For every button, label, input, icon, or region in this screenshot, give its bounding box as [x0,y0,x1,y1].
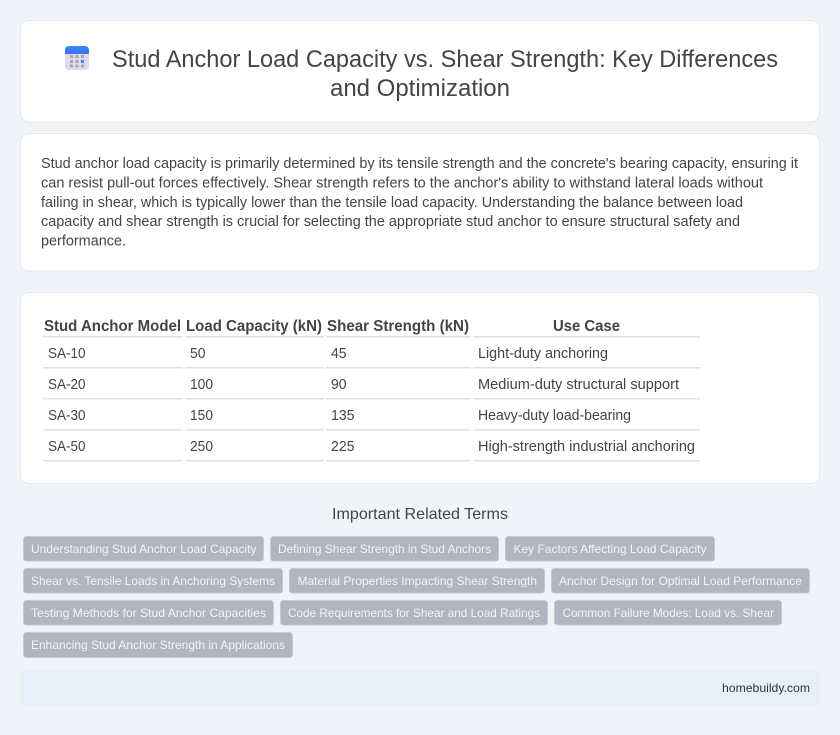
title: and Optimization [330,75,510,102]
row: SA-50 [48,439,695,455]
row: SA-30: SA-30 [48,408,86,424]
icon: calendar [65,46,89,70]
row: SA-10: Light-duty anchoring [478,346,608,362]
tag [280,600,548,625]
related term tags [24,536,810,658]
summary text: performance. [41,234,126,250]
tag [554,600,782,625]
row: SA-50: SA-50 [48,439,86,455]
tag [24,632,292,658]
tag [552,568,810,593]
tag: Understanding Stud Anchor Load Capacity [31,542,256,556]
tag [24,600,274,625]
row: SA-30: 150 [190,408,213,424]
row: SA-20: 100 [190,377,213,393]
summary text: Stud anchor load capacity is primarily determined by its tensile strength and the concrete's bearing capacity, ensuring it [41,156,798,172]
row: SA-30 [48,408,631,424]
tag: Shear vs. Tensile Loads in Anchoring Systems [31,574,275,588]
row: SA-20: SA-20 [48,377,86,393]
panel: comparison table [20,292,820,484]
table header: Load Capacity (kN) [186,318,322,335]
row: SA-50: 250 [190,439,213,455]
summary text: failing in shear, which is typically lower than the tensile load capacity. Understanding the balance between load [41,195,743,211]
row: SA-10: 45 [331,346,346,362]
row: SA-10: 50 [190,346,206,362]
row: SA-50: 225 [331,439,354,455]
footer [20,671,820,705]
tag [270,536,498,561]
heading: important related terms: Important Related Terms [332,506,508,523]
tag: Material Properties Impacting Shear Strength [298,574,537,588]
row: SA-50: High-strength industrial anchoring [478,439,695,455]
row: SA-10: SA-10 [48,346,86,362]
tag: Enhancing Stud Anchor Strength in Applications [31,638,285,652]
row: SA-10 [48,346,608,362]
table header: Stud Anchor Model [44,318,181,335]
row: SA-20: 90 [331,377,346,393]
row: SA-20: Medium-duty structural support [478,377,679,393]
tag [290,568,544,593]
summary text: capacity and shear strength is crucial for selecting the appropriate stud anchor to ensure structural safety and [41,214,740,230]
row: SA-30: 135 [331,408,354,424]
table header: Shear Strength (kN) [327,318,469,335]
tag: Testing Methods for Stud Anchor Capacities [31,606,266,620]
tag [24,568,282,593]
tag [506,536,714,561]
tag: Defining Shear Strength in Stud Anchors [278,542,491,556]
tag: Code Requirements for Shear and Load Ratings [288,606,540,620]
tag: Anchor Design for Optimal Load Performance [559,574,802,588]
panel: header [20,20,820,122]
footer: homebuildy.com [722,681,810,695]
summary text [41,156,798,250]
title: Stud Anchor Load Capacity vs. Shear Strength: Key Differences [112,46,778,73]
summary text: can resist pull-out forces effectively. Shear strength refers to the anchor's ability to withstand lateral loads without [41,175,763,191]
table header [44,318,620,335]
panel: summary [20,134,820,271]
tag: Key Factors Affecting Load Capacity [514,542,706,556]
row: SA-30: Heavy-duty load-bearing [478,408,631,424]
tag: Common Failure Modes: Load vs. Shear [562,606,774,620]
title [112,46,778,102]
row: SA-20 [48,377,679,393]
table header: Use Case [553,318,620,335]
tag [24,536,264,561]
